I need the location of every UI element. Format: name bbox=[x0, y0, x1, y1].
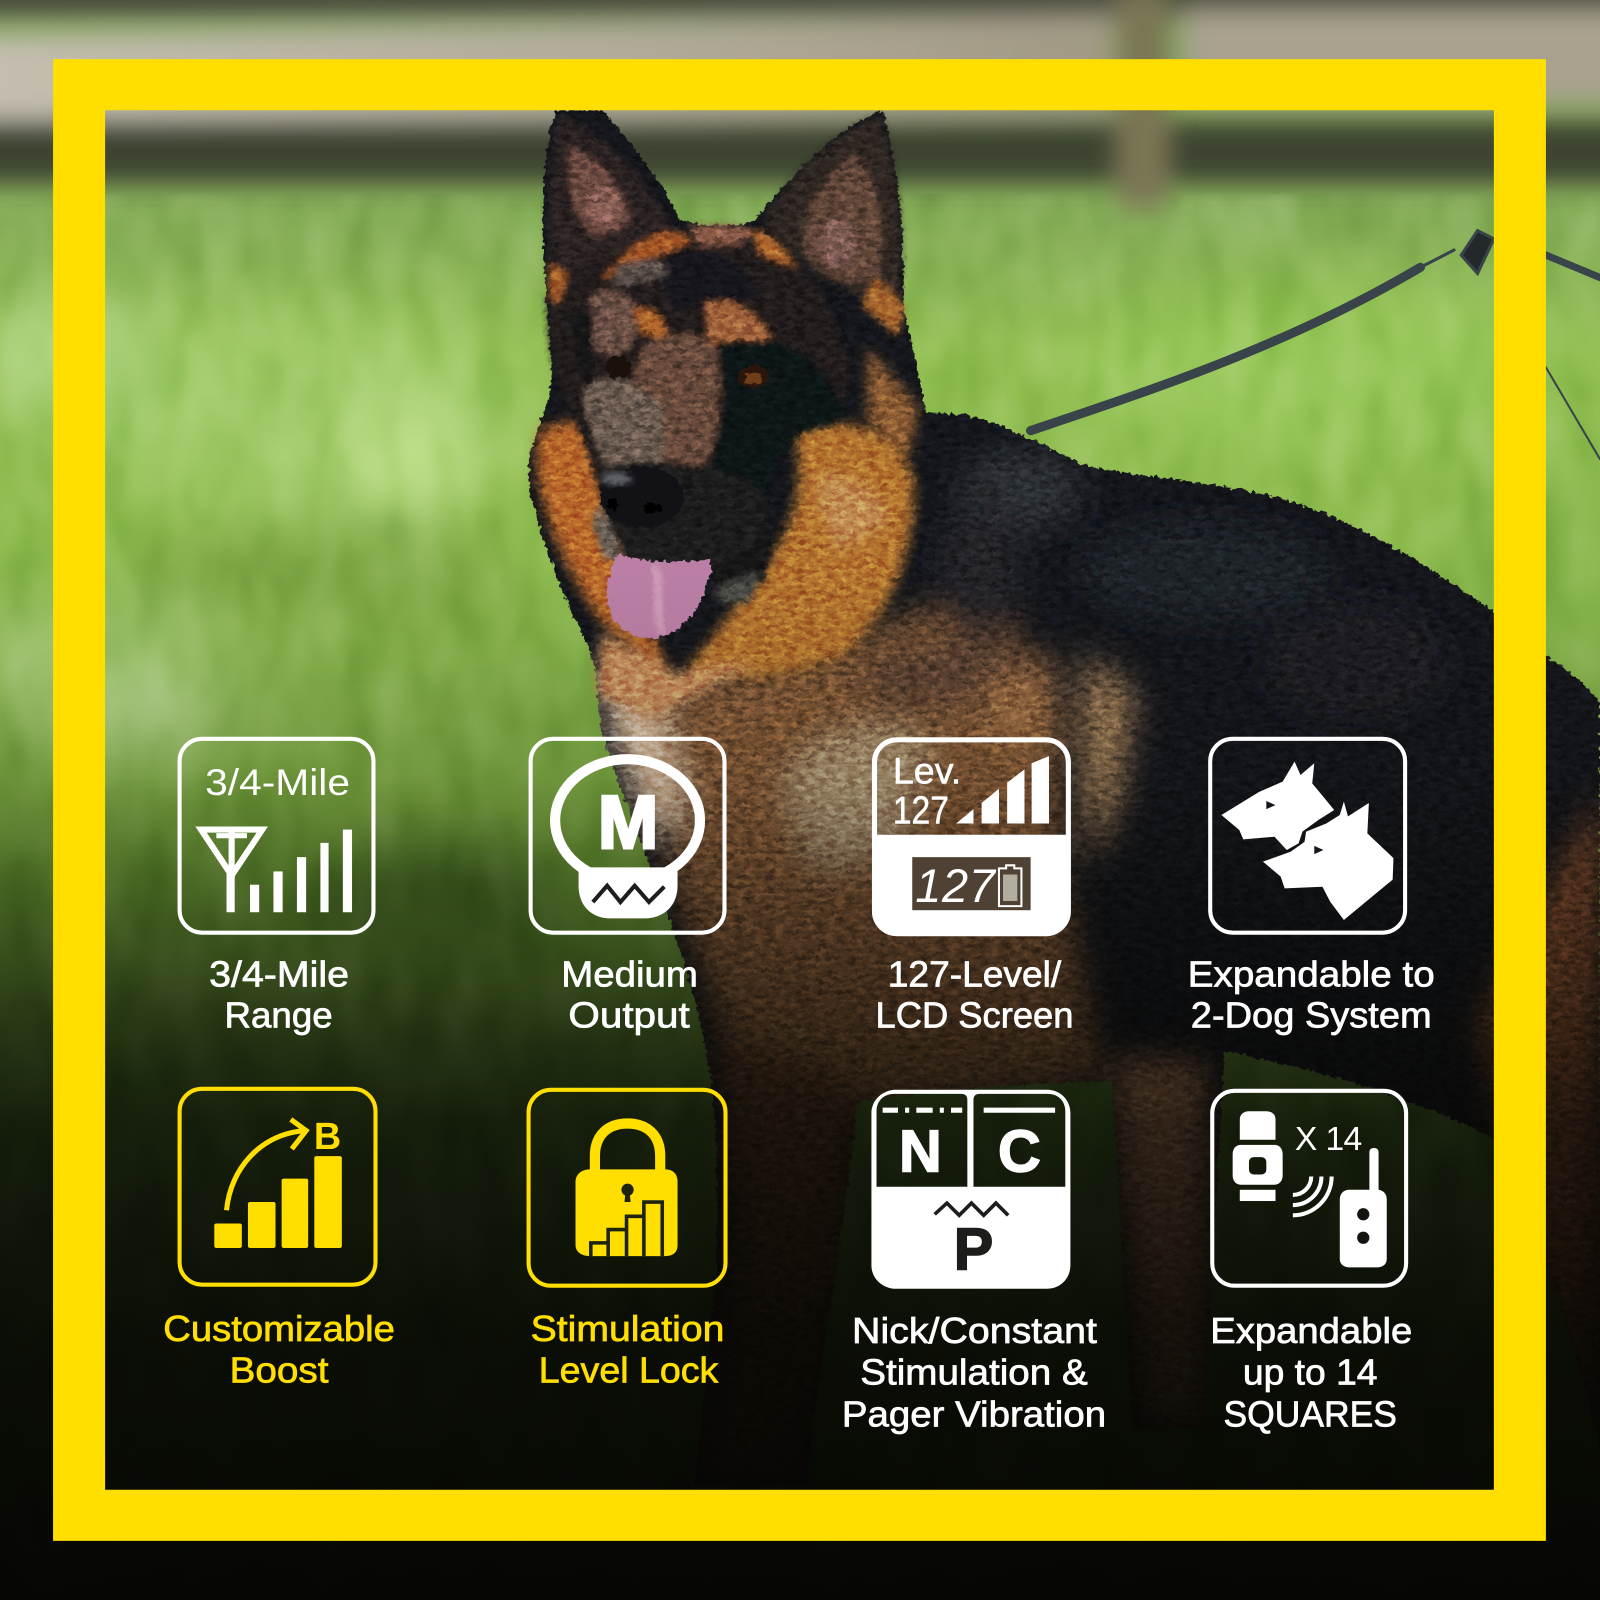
icon: N C P modes bbox=[871, 1090, 1070, 1289]
label: 127-level LCD screen: 127-Level/ bbox=[888, 955, 1061, 995]
icon: medium output bulb: M bbox=[598, 781, 658, 865]
label: stimulation level lock: Stimulation bbox=[531, 1309, 724, 1349]
label: expandable to 2-dog system: Expandable to bbox=[1188, 955, 1435, 995]
label: nick constant pager: Nick/Constant bbox=[852, 1311, 1097, 1351]
label: medium output: Output bbox=[568, 996, 690, 1036]
label: expandable up to 14 squares bbox=[1210, 1311, 1412, 1435]
label: 127-level LCD screen: LCD Screen bbox=[876, 996, 1073, 1036]
icon: LCD remote screen: 127 bbox=[893, 789, 949, 832]
icon: collar and remote x14: X 14 bbox=[1295, 1121, 1362, 1158]
label: 3/4-mile range bbox=[209, 955, 349, 1036]
feature: expandable up to 14 squares bbox=[1210, 1091, 1412, 1435]
label: 127-level LCD screen bbox=[876, 955, 1073, 1036]
label: nick constant pager bbox=[842, 1311, 1106, 1435]
bottom fade overlay bbox=[0, 571, 1600, 1600]
label: medium output: Medium bbox=[561, 955, 698, 995]
label: medium output bbox=[561, 955, 698, 1036]
icon: N C P modes: N bbox=[899, 1117, 942, 1184]
icon: LCD remote screen: 127 bbox=[915, 860, 997, 912]
feature: 127-level LCD screen bbox=[872, 740, 1073, 1036]
dog head markings bbox=[547, 114, 905, 602]
icon: collar and remote x14 bbox=[1212, 1091, 1406, 1286]
icon: two dog heads bbox=[1210, 739, 1405, 933]
dog tongue bbox=[607, 553, 711, 638]
dog body fur colours bbox=[597, 449, 1600, 1480]
icon: boost bars bbox=[180, 1089, 376, 1285]
label: expandable up to 14 squares: up to 14 bbox=[1243, 1353, 1378, 1393]
label: 3/4-mile range: 3/4-Mile bbox=[209, 955, 349, 995]
label: customizable boost bbox=[163, 1309, 395, 1391]
label: stimulation level lock bbox=[531, 1309, 724, 1391]
label: nick constant pager: Stimulation & bbox=[860, 1353, 1088, 1393]
label: customizable boost: Customizable bbox=[163, 1309, 395, 1349]
icon: medium output bulb bbox=[531, 739, 724, 933]
label: expandable to 2-dog system bbox=[1188, 955, 1435, 1036]
icon: LCD remote screen: Lev. bbox=[893, 751, 961, 792]
feature: medium output bbox=[531, 739, 724, 1036]
icon: boost bars: B bbox=[314, 1115, 341, 1157]
label: customizable boost: Boost bbox=[230, 1351, 329, 1391]
icon: N C P modes: P bbox=[954, 1215, 993, 1282]
icon: antenna and signal bars: 3/4-Mile bbox=[205, 762, 350, 803]
icon: N C P modes: C bbox=[998, 1117, 1041, 1184]
icon: LCD remote screen bbox=[872, 740, 1070, 936]
dog ruff and cheek bbox=[537, 347, 918, 719]
dog fur grain bbox=[528, 110, 1600, 1239]
feature: customizable boost bbox=[163, 1089, 395, 1391]
feature: stimulation level lock bbox=[529, 1090, 726, 1391]
feature: nick constant pager bbox=[842, 1090, 1106, 1435]
label: 3/4-mile range: Range bbox=[224, 996, 333, 1036]
photo: german shepherd bbox=[510, 102, 1600, 1500]
dog body silhouette bbox=[529, 110, 1600, 1485]
leash bbox=[1031, 231, 1600, 459]
dog eyes bbox=[605, 356, 768, 388]
label: expandable up to 14 squares: Expandable bbox=[1210, 1311, 1412, 1351]
feature: 3/4-mile range bbox=[180, 739, 373, 1036]
dog nose bbox=[600, 466, 684, 528]
label: expandable up to 14 squares: SQUARES bbox=[1223, 1395, 1397, 1435]
icon: padlock bbox=[529, 1090, 726, 1286]
label: stimulation level lock: Level Lock bbox=[539, 1351, 719, 1391]
icon: antenna and signal bars bbox=[180, 739, 373, 933]
label: expandable to 2-dog system: 2-Dog System bbox=[1191, 996, 1432, 1036]
label: nick constant pager: Pager Vibration bbox=[842, 1395, 1106, 1435]
feature: expandable to 2-dog system bbox=[1188, 739, 1435, 1036]
